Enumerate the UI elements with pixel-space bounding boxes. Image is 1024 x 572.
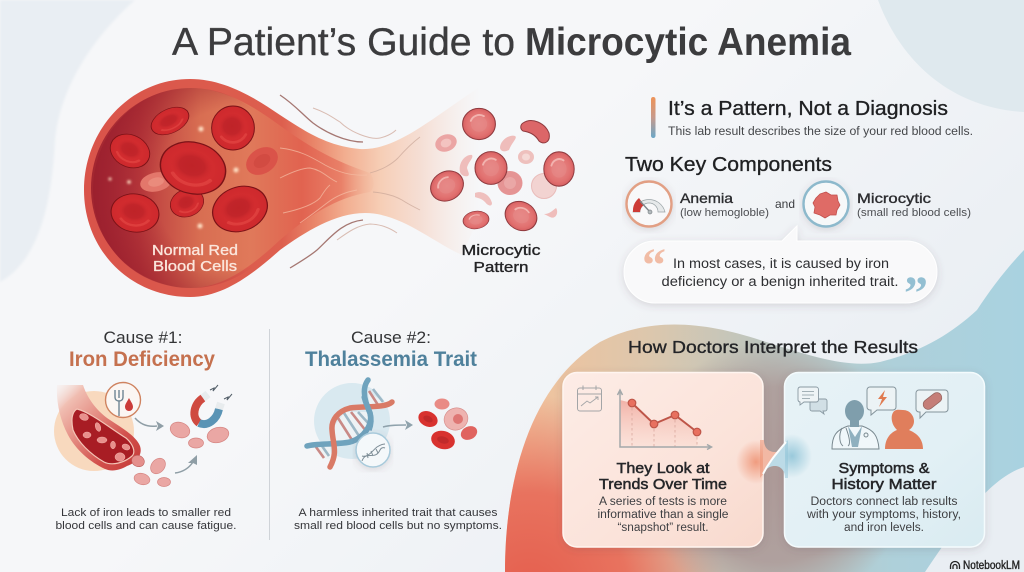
callout: quote bubble: deficiency or a benign inherited trait. [662, 274, 898, 290]
description: blood cells and can cause fatigue. [56, 520, 236, 532]
card text: “snapshot” result. [618, 522, 708, 534]
callout: quote bubble [624, 226, 937, 320]
arrow [175, 462, 193, 473]
close quote: ” [904, 267, 928, 320]
heading [305, 328, 477, 371]
text: microcytic [857, 190, 971, 219]
normal red blood cells [105, 102, 283, 239]
icon: gauge [626, 182, 672, 226]
title [172, 21, 852, 64]
illustration: iron deficiency [54, 382, 232, 486]
icon: pill bubble [916, 390, 948, 418]
label: microcytic pattern: Microcytic [462, 242, 541, 259]
icon: magnet [194, 385, 232, 424]
vessel [57, 385, 141, 470]
panel: trends over time [563, 372, 763, 547]
panel: symptoms and history [784, 372, 984, 547]
illustration: blood vessel flow from normal to microcytic cells [84, 79, 574, 297]
description: A harmless inherited trait that causes [298, 507, 498, 519]
panel: cause 1 [54, 328, 236, 532]
icon: fork and drop [106, 382, 140, 418]
card heading: They Look at [616, 460, 710, 477]
text: microcytic: (small red blood cells) [857, 207, 971, 219]
icon: symptom bubble [867, 387, 896, 415]
card heading [599, 460, 727, 493]
card text: A series of tests is more [599, 496, 727, 508]
vessel funnel [84, 79, 500, 297]
icon: patient [885, 410, 923, 449]
microcytic cells [425, 108, 574, 236]
illustration: DNA and cells [307, 380, 479, 467]
card text: with your symptoms, history, [806, 509, 961, 521]
card heading [832, 460, 936, 493]
panel: cause 2 [294, 328, 502, 532]
line chart [618, 390, 712, 450]
label: microcytic pattern [462, 242, 541, 276]
description [294, 507, 502, 532]
description: small red blood cells but no symptoms. [294, 520, 502, 532]
subheading: This lab result describes the size of your red blood cells. [668, 124, 973, 138]
heading: Cause #1: [104, 328, 182, 347]
card text: and iron levels. [844, 522, 924, 534]
panel: two key components [625, 153, 971, 226]
icon: small red cell [804, 182, 848, 226]
accent bar [651, 97, 656, 138]
text: anemia [680, 190, 769, 219]
title: A Patient’s Guide to [172, 21, 515, 64]
label: normal red blood cells: Normal Red [152, 242, 238, 259]
cells [416, 398, 479, 452]
label: normal red blood cells: Blood Cells [153, 258, 237, 275]
heading: Cause #2: [351, 328, 431, 347]
card text [598, 496, 728, 534]
title: Microcytic Anemia [525, 21, 852, 64]
quote text: In most cases, it is caused by iron [673, 256, 889, 272]
card heading: History Matter [832, 476, 936, 493]
description: Lack of iron leads to smaller red [61, 507, 231, 519]
label: microcytic pattern: Pattern [474, 259, 528, 276]
small cells [133, 420, 231, 486]
icon: DNA badge [356, 433, 390, 467]
description [56, 507, 236, 532]
arrow [383, 425, 406, 427]
icon: chat bubbles [798, 387, 827, 414]
heading: Thalassemia Trait [305, 348, 477, 371]
text: microcytic: Microcytic [857, 190, 931, 206]
card heading: Symptoms & [838, 460, 930, 477]
label: normal red blood cells [152, 242, 238, 275]
text: and: and [775, 197, 795, 211]
card heading: Trends Over Time [599, 476, 727, 493]
sparkles [108, 126, 238, 228]
text: anemia: (low hemogloble) [680, 207, 769, 219]
connector between cards [738, 436, 810, 482]
arrow [135, 418, 157, 426]
flow lines [280, 95, 420, 268]
heading: It’s a Pattern, Not a Diagnosis [668, 97, 948, 120]
text: anemia: Anemia [680, 190, 733, 206]
divider [268, 329, 270, 540]
open quote: “ [642, 239, 666, 292]
panel: pattern heading [651, 97, 973, 138]
DNA helix [307, 380, 392, 467]
heading: Iron Deficiency [69, 348, 215, 371]
icon: calendar [578, 386, 602, 411]
bulb interior [91, 88, 374, 288]
heading [69, 328, 215, 371]
icon: doctor [832, 400, 879, 449]
card text: Doctors connect lab results [810, 496, 958, 508]
heading: Two Key Components [625, 153, 832, 176]
card text: informative than a single [598, 509, 728, 521]
heading: how doctors interpret the results: How Doctors Interpret the Results [628, 337, 918, 357]
card text [806, 496, 961, 534]
